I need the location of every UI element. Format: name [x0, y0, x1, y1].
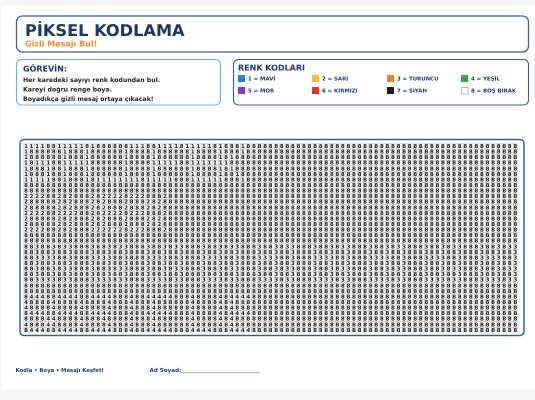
name field: Ad Soyad:	[150, 367, 181, 374]
number grid panel: 883333883888333388388833338838883333883888333388388833338838883333883888333388388833338838	[24, 255, 525, 261]
header panel	[16, 16, 528, 52]
legend: 3 = TURUNCU	[397, 76, 438, 82]
number grid panel: 88888888888888888888888888888888888888888888888888888888888888888888888888888888888888888	[24, 239, 519, 245]
number grid panel: 88888888888888888888888888888888888888888888888888888888888888888888888888888888888888888	[24, 233, 519, 239]
number grid panel	[20, 140, 525, 336]
number grid panel: 883883833888388383388838838338883883833888388383388838838338883883833888388383388838838338	[24, 267, 525, 273]
number grid panel: 88888888888888888888888888888888888888888888888888888888888888888888888888888888888888888	[24, 183, 519, 189]
number grid panel: 88888888888888888888888888888888888888888888888888888888888888888888888888888888888888888	[24, 283, 519, 289]
number grid panel: 883883883888388388388838838838883883883888388388388838838838883883883888388388388838838838	[24, 261, 525, 267]
task instructions: Kareyi doğru renge boya.	[23, 86, 112, 94]
footer tagline: Kodla • Boya • Mesajı Keşfet!	[16, 367, 104, 374]
legend: 1 = MAVİ	[248, 76, 275, 82]
number grid panel: 883333833888333383388833338338883333833888333383388833338338883333833888333383388833338338	[24, 278, 525, 284]
number grid panel: 11118811111818888881118811118111118188818888888888888888888888888888888888888888888888888	[24, 144, 519, 150]
number grid panel: 883883883888388388388838838838883883883888388388388838838838883883883888388388388838838838	[24, 272, 525, 278]
task instructions	[23, 77, 160, 103]
number grid panel: 28888828288828288828882828888888888888888888888888888888888888888888888888888888888888888	[24, 205, 519, 211]
number grid panel: 48884488884888848884888488888848888484888888888888888888888888888888888888888888888888888	[24, 322, 519, 328]
panel: colour codes	[234, 60, 528, 105]
number grid panel: 11111881888181111111181111188811111188818888888888888888888888888888888888888888888888888	[24, 177, 519, 183]
number grid panel: 18881881888188888818888188888818888188188888888888888888888888888888888888888888888888888	[24, 172, 519, 178]
number grid panel: 18888881888188888818888188888818888181888888888888888888888888888888888888888888888888888	[24, 155, 519, 161]
number grid panel: 883883833888388383388838838338883883833888388383388838838338883883833888388383388838838338	[24, 244, 525, 250]
task instructions: Her karedeki sayıyı renk kodundan bul.	[23, 77, 160, 84]
legend	[238, 75, 517, 94]
legend: 4 = YEŞİL	[471, 76, 500, 82]
number grid panel: 18111881111188888818888111118811111118888888888888888888888888888888888888888888888888888	[24, 161, 519, 167]
number grid panel: 28888828288828288828882828888888888888888888888888888888888888888888888888888888888888888	[24, 222, 519, 228]
subtitle: Gizli Mesajı Bul!	[25, 40, 97, 48]
legend: 6 = KIRMIZI	[322, 88, 358, 94]
legend: 8 = BOŞ BIRAK	[471, 88, 517, 94]
number grid panel: 84448844448844448884884444488844448884444888888888888888888888888888888888888888888888888	[24, 328, 519, 334]
number grid panel: 84448844448844448884884444488848888484444888888888888888888888888888888888888888888888888	[24, 294, 519, 300]
number grid panel: 18888881888188888818888188888818888188818888888888888888888888888888888888888888888888888	[24, 150, 519, 156]
number grid panel: 48888488884888848884888488888848888484888888888888888888888888888888888888888888888888888	[24, 306, 519, 312]
number grid panel: 84448844448844448884884444488848888484444888888888888888888888888888888888888888888888888	[24, 311, 519, 317]
colour codes heading: RENK KODLARI	[238, 63, 305, 72]
name field	[150, 367, 260, 374]
number grid panel: 22228828288822222282228882888888888888888888888888888888888888888888888888888888888888888	[24, 228, 519, 234]
number grid panel: 88884488884888488884888488888848888484888888888888888888888888888888888888888888888888888	[24, 317, 519, 323]
number grid panel: 28888828288828288828882828888888888888888888888888888888888888888888888888888888888888888	[24, 216, 519, 222]
legend: 7 = SİYAH	[397, 88, 427, 94]
number grid panel: 88888888888888888888888888888888888888888888888888888888888888888888888888888888888888888	[24, 289, 519, 295]
panel: task	[16, 60, 220, 105]
number grid panel: 28888828288828288828882828888888888888888888888888888888888888888888888888888888888888888	[24, 200, 519, 206]
number grid panel: 88888888888888888888888888888888888888888888888888888888888888888888888888888888888888888	[24, 189, 519, 195]
task heading: GÖREVİN:	[23, 64, 67, 74]
title: PİKSEL KODLAMA	[25, 20, 185, 40]
number grid panel: 22228822228828222282228882888888888888888888888888888888888888888888888888888888888888888	[24, 211, 519, 217]
legend: 5 = MOR	[248, 88, 275, 94]
number grid panel: 883883883888388388388838838838883883883888388388388838838838883883883888388388388838838838	[24, 250, 525, 256]
task instructions: Boyadıkça gizli mesaj ortaya çıkacak!	[23, 96, 154, 103]
number grid panel: 48888488884888848884888488888848888484888888888888888888888888888888888888888888888888888	[24, 300, 519, 306]
number grid panel: 22228828288828222282228882888888888888888888888888888888888888888888888888888888888888888	[24, 194, 519, 200]
legend: 2 = SARI	[322, 76, 348, 82]
number grid panel: 18881881888188888818888188888818888181888888888888888888888888888888888888888888888888888	[24, 166, 519, 172]
